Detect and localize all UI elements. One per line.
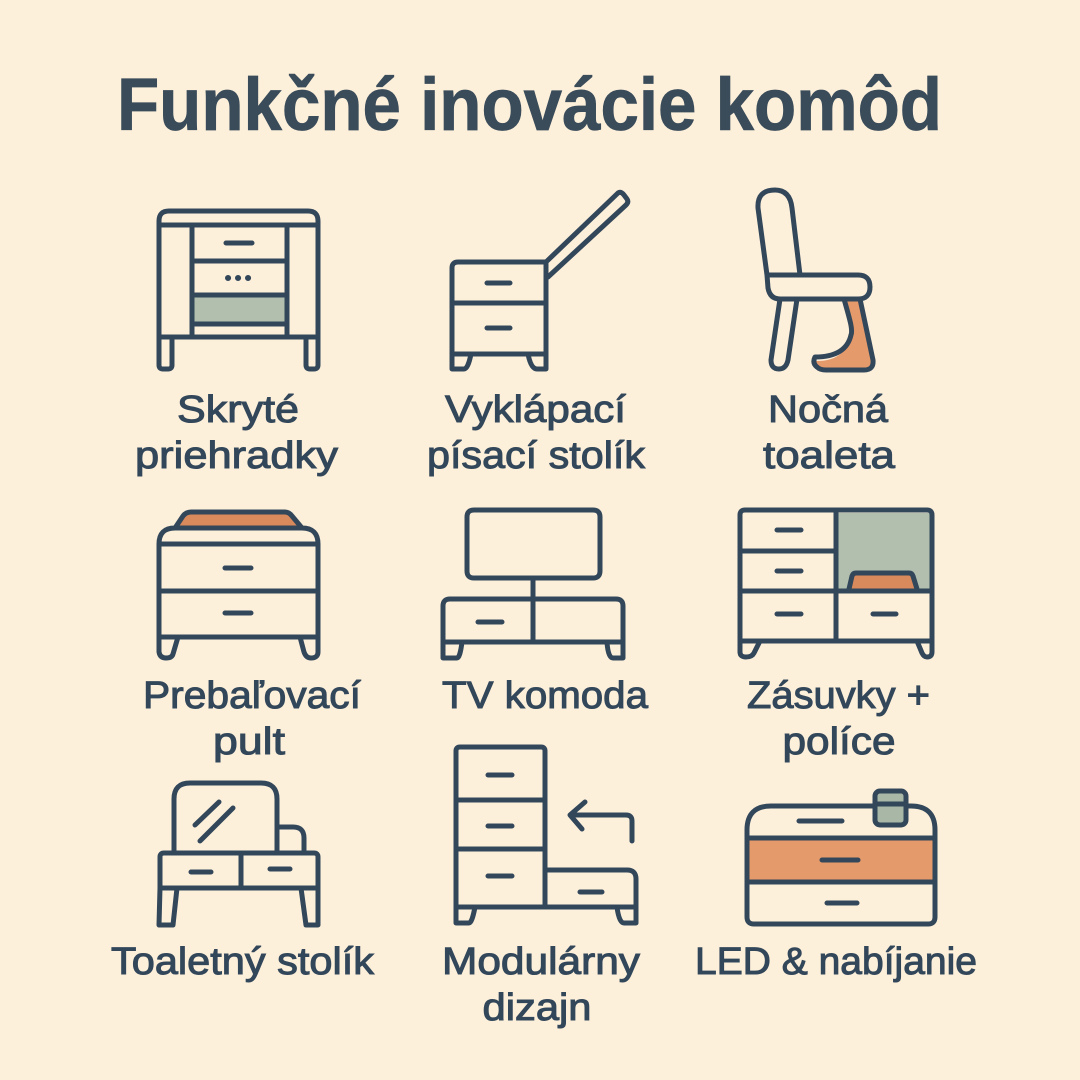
icon: fold-out desk [452,192,628,369]
icon: modular design [456,747,636,923]
icon: changing table [159,512,318,658]
icon: night chair [758,190,873,370]
label: Prebaľovací pult [143,675,361,763]
label: Zásuvky + police: Zásuvky + [747,675,930,717]
label: Nočná toaleta: Nočná [768,389,889,431]
label: Nočná toaleta [763,389,896,477]
label: Zásuvky + police [747,675,930,763]
label: Modulárny dizajn: dizajn [482,987,592,1029]
label: Skryté priehradky: Skryté [177,389,299,431]
label: Modulárny dizajn: Modulárny [442,941,640,983]
label: Zásuvky + police: políce [782,721,896,763]
label: Prebaľovací pult: pult [213,721,286,763]
icon: LED and charging [747,791,935,924]
label: TV komoda: TV komoda [442,675,649,717]
icon: dressing table [159,783,318,925]
label: Vyklápací písací stolík [427,389,646,477]
label: Skryté priehradky [135,389,338,477]
label: Nočná toaleta: toaleta [763,435,896,477]
label: Prebaľovací pult: Prebaľovací [143,675,361,717]
label: Skryté priehradky: priehradky [135,435,338,477]
icon: drawers and shelves [740,510,932,657]
label: LED & nabíjanie: LED & nabíjanie [695,941,977,983]
label: Vyklápací písací stolík: Vyklápací [445,389,626,431]
label: Toaletný stolík: Toaletný stolík [111,941,375,983]
title: Funkčné inovácie komôd [117,63,942,146]
label: Modulárny dizajn [442,941,640,1029]
icon: TV chest [443,510,623,658]
label: Vyklápací písací stolík: písací stolík [427,435,646,477]
icon: hidden compartments [159,211,318,369]
